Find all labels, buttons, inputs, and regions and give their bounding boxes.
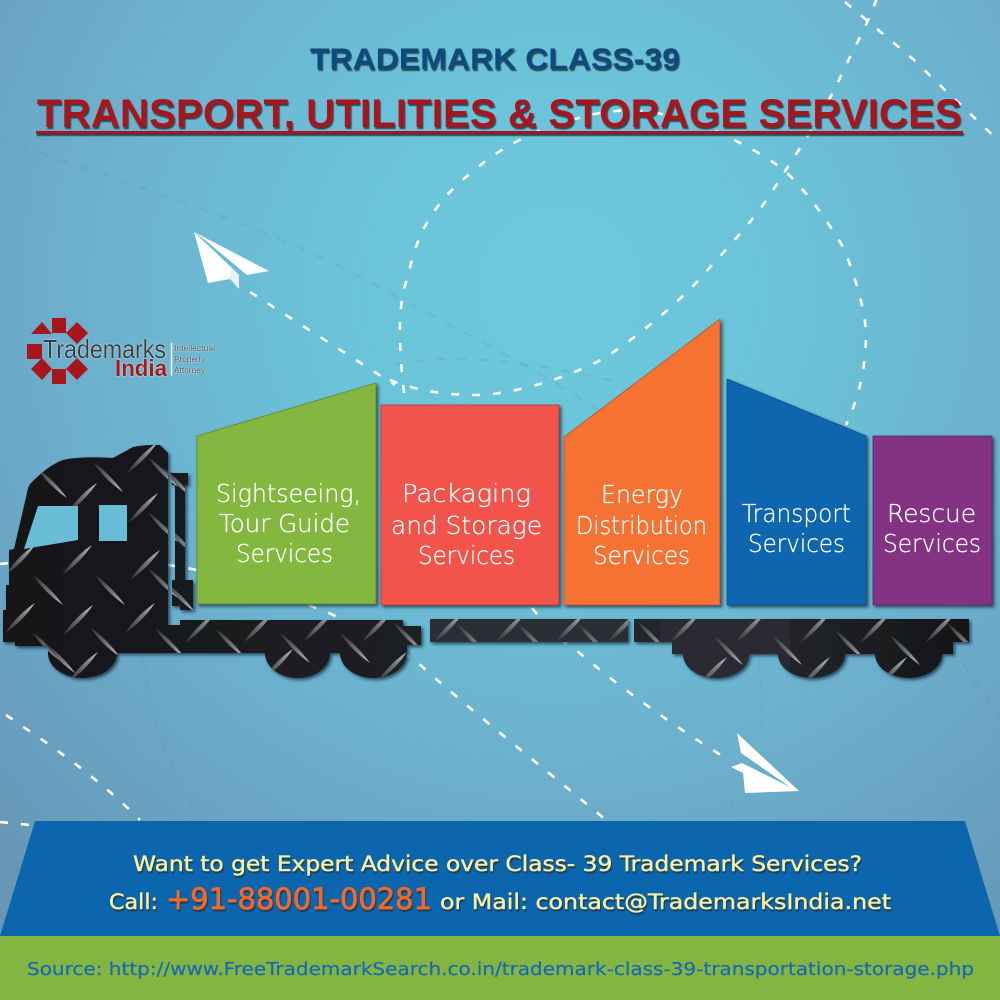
panel: sightseeing: Services [236, 539, 333, 568]
truck silhouette with diamond plate [0, 440, 1000, 687]
logo tagline: Intellectual [174, 344, 215, 353]
advice question: Want to get Expert Advice over Class- 39 Trademark Services? [133, 852, 862, 876]
panel: rescue [873, 436, 992, 605]
contact line: Call: [109, 890, 158, 914]
icon: paper plane top left [194, 232, 269, 289]
panel: sightseeing: Tour Guide [219, 509, 350, 538]
panel: energy [564, 319, 720, 605]
panel: rescue: Services [883, 529, 981, 558]
panel: sightseeing [197, 383, 376, 604]
panel: transport [727, 379, 866, 605]
panel: energy: Distribution [576, 511, 707, 540]
contact line [109, 882, 891, 916]
title: main heading: TRANSPORT, UTILITIES & STORAGE SERVICES [37, 92, 962, 136]
panel: rescue: Rescue [887, 499, 976, 528]
panel: transport: Transport [742, 499, 851, 528]
contact line: +91-88001-00281 [166, 882, 432, 916]
logo: Trademarks India [27, 318, 215, 384]
faint background dashed lines [0, 140, 1000, 830]
panel: energy: Services [593, 541, 690, 570]
panel: packaging: and Storage [391, 511, 542, 540]
truck [0, 440, 1000, 687]
call to action banner [0, 821, 1000, 936]
title: class line: TRADEMARK CLASS-39 [310, 43, 680, 76]
cab windows [24, 505, 127, 549]
panel: energy: Energy [601, 480, 683, 509]
logo mark [27, 318, 88, 384]
panel: packaging [381, 405, 559, 605]
logo tagline: Attorney [174, 366, 205, 375]
panel: packaging: Services [418, 541, 515, 570]
source bar [0, 936, 1000, 1000]
panel: sightseeing: Sightseeing, [216, 479, 361, 508]
logo India: India [115, 355, 167, 381]
contact line: or Mail: contact@TrademarksIndia.net [440, 890, 891, 914]
source url: Source: http://www.FreeTrademarkSearch.co.in/trademark-class-39-transportation-storage.php [27, 959, 974, 980]
icon: paper plane bottom right [731, 733, 799, 793]
logo tagline: Property [174, 355, 205, 364]
panel: transport: Services [748, 529, 845, 558]
logo tagline [171, 343, 215, 376]
panel: packaging: Packaging [402, 479, 531, 508]
logo wordmark: Trademarks [43, 334, 166, 364]
